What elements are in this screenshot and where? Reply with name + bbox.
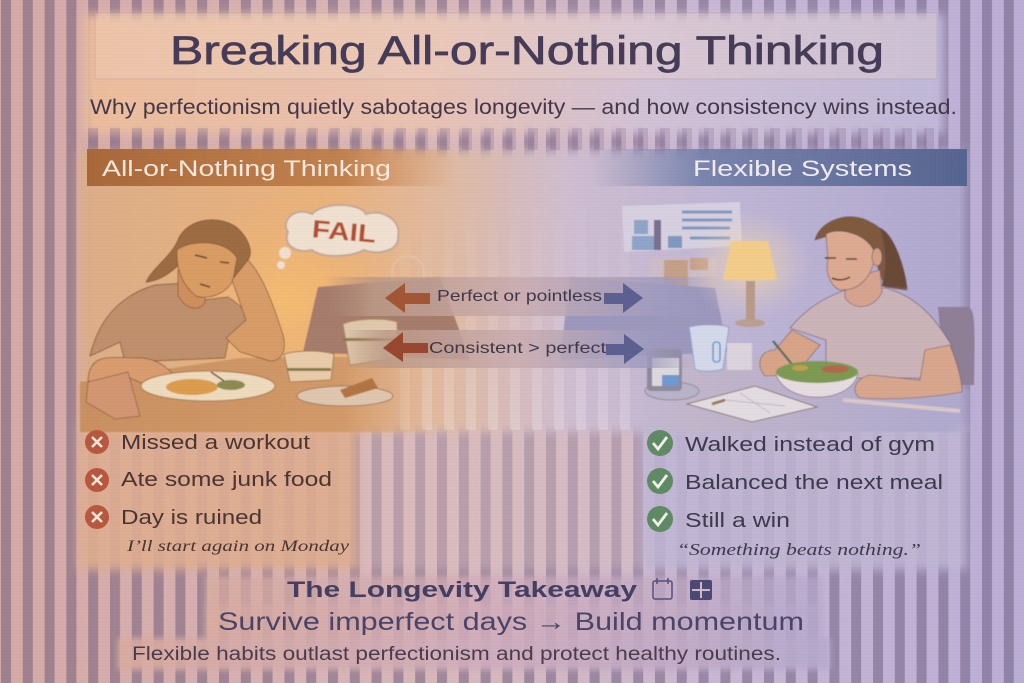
takeaway line: Survive imperfect days → Build momentum — [218, 608, 804, 636]
propping arm — [226, 260, 284, 361]
middle comparison bands — [325, 277, 720, 368]
item: balanced the next meal: Balanced the next meal — [685, 472, 943, 494]
eyes and mouth — [195, 255, 229, 287]
title panel — [95, 13, 937, 79]
item: walked instead of gym — [647, 430, 935, 456]
panel: longevity takeaway — [118, 576, 830, 670]
jar on coaster — [645, 349, 699, 400]
painted scene backdrop — [78, 14, 967, 570]
arrow: right bottom — [606, 334, 644, 364]
woman left — [88, 220, 284, 393]
fork — [773, 341, 795, 368]
arm with fork — [760, 330, 820, 376]
panel: left scene, all-or-nothing — [80, 185, 470, 432]
list: flexible systems items — [647, 430, 943, 559]
salad bowl — [776, 361, 858, 397]
warm glow — [150, 185, 420, 415]
neck — [178, 270, 205, 308]
laptop screen right — [560, 277, 728, 360]
item: ate some junk food — [85, 468, 332, 492]
lower notes — [650, 258, 716, 288]
table right — [620, 356, 980, 432]
item: day is ruined — [85, 505, 262, 529]
plate left — [141, 371, 275, 401]
ghost plate on wall — [392, 256, 424, 288]
arm to bowl — [855, 345, 962, 399]
panel: right scene, flexible systems — [560, 202, 980, 432]
torso — [90, 283, 250, 362]
takeaway note: Flexible habits outlast perfectionism and protect healthy routines. — [132, 644, 781, 665]
lamp — [688, 210, 812, 327]
item: balanced the next meal — [647, 468, 943, 494]
item: ate some junk food: Ate some junk food — [121, 469, 332, 491]
label: perfect or pointless: Perfect or pointless — [437, 288, 602, 305]
takeaway heading: The Longevity Takeaway — [287, 577, 638, 602]
left heading band — [87, 149, 457, 186]
takeaway backdrop — [118, 576, 830, 670]
icon: grid — [690, 580, 712, 600]
poster on wall — [622, 202, 742, 252]
torso — [790, 288, 952, 378]
item: missed a workout — [85, 430, 311, 454]
thought bubble FAIL: FAIL — [311, 215, 377, 249]
large mug — [343, 319, 398, 365]
item: day is ruined: Day is ruined — [121, 507, 262, 529]
arrow: left bottom — [383, 332, 428, 362]
item: still a win: Still a win — [685, 510, 790, 532]
label: consistent over perfect: Consistent > perfect — [429, 340, 607, 357]
hair — [146, 220, 250, 282]
arrow: left top — [385, 283, 430, 313]
ponytail — [880, 228, 907, 288]
glass — [689, 325, 729, 371]
icon: calendar — [653, 578, 672, 599]
quote: something beats nothing: “Something beats nothing.” — [677, 540, 921, 559]
eyes and mouth — [825, 258, 857, 280]
napkin — [86, 372, 140, 419]
small cup — [284, 351, 334, 382]
clipboard — [687, 386, 817, 422]
note card — [727, 343, 752, 370]
face — [826, 231, 875, 290]
title: Breaking All-or-Nothing Thinking — [170, 29, 884, 73]
neck — [845, 270, 882, 307]
item: missed a workout: Missed a workout — [121, 432, 311, 454]
woman right — [760, 217, 962, 399]
left heading band: All-or-Nothing Thinking — [102, 156, 391, 181]
quote: monday: I’ll start again on Monday — [126, 538, 350, 555]
item: still a win — [647, 506, 790, 532]
pen line — [843, 400, 960, 411]
thought bubble FAIL — [277, 205, 399, 269]
side plate — [297, 386, 393, 406]
laptop screen left — [303, 277, 470, 360]
faint light stripes in centre of scene — [400, 368, 630, 430]
faint stripes over header gap — [85, 128, 945, 150]
hair — [815, 217, 907, 290]
right heading band — [590, 149, 967, 186]
face — [177, 243, 237, 297]
arrow: right top — [604, 283, 643, 313]
chair — [938, 307, 974, 385]
table left — [80, 356, 430, 432]
item: walked instead of gym: Walked instead of gym — [685, 434, 935, 456]
list: all-or-nothing items — [85, 430, 350, 555]
right heading band: Flexible Systems — [693, 156, 912, 181]
subtitle: Why perfectionism quietly sabotages longevity — and how consistency wins instead. — [90, 96, 957, 119]
resting arm — [88, 357, 180, 393]
ear — [872, 248, 882, 266]
